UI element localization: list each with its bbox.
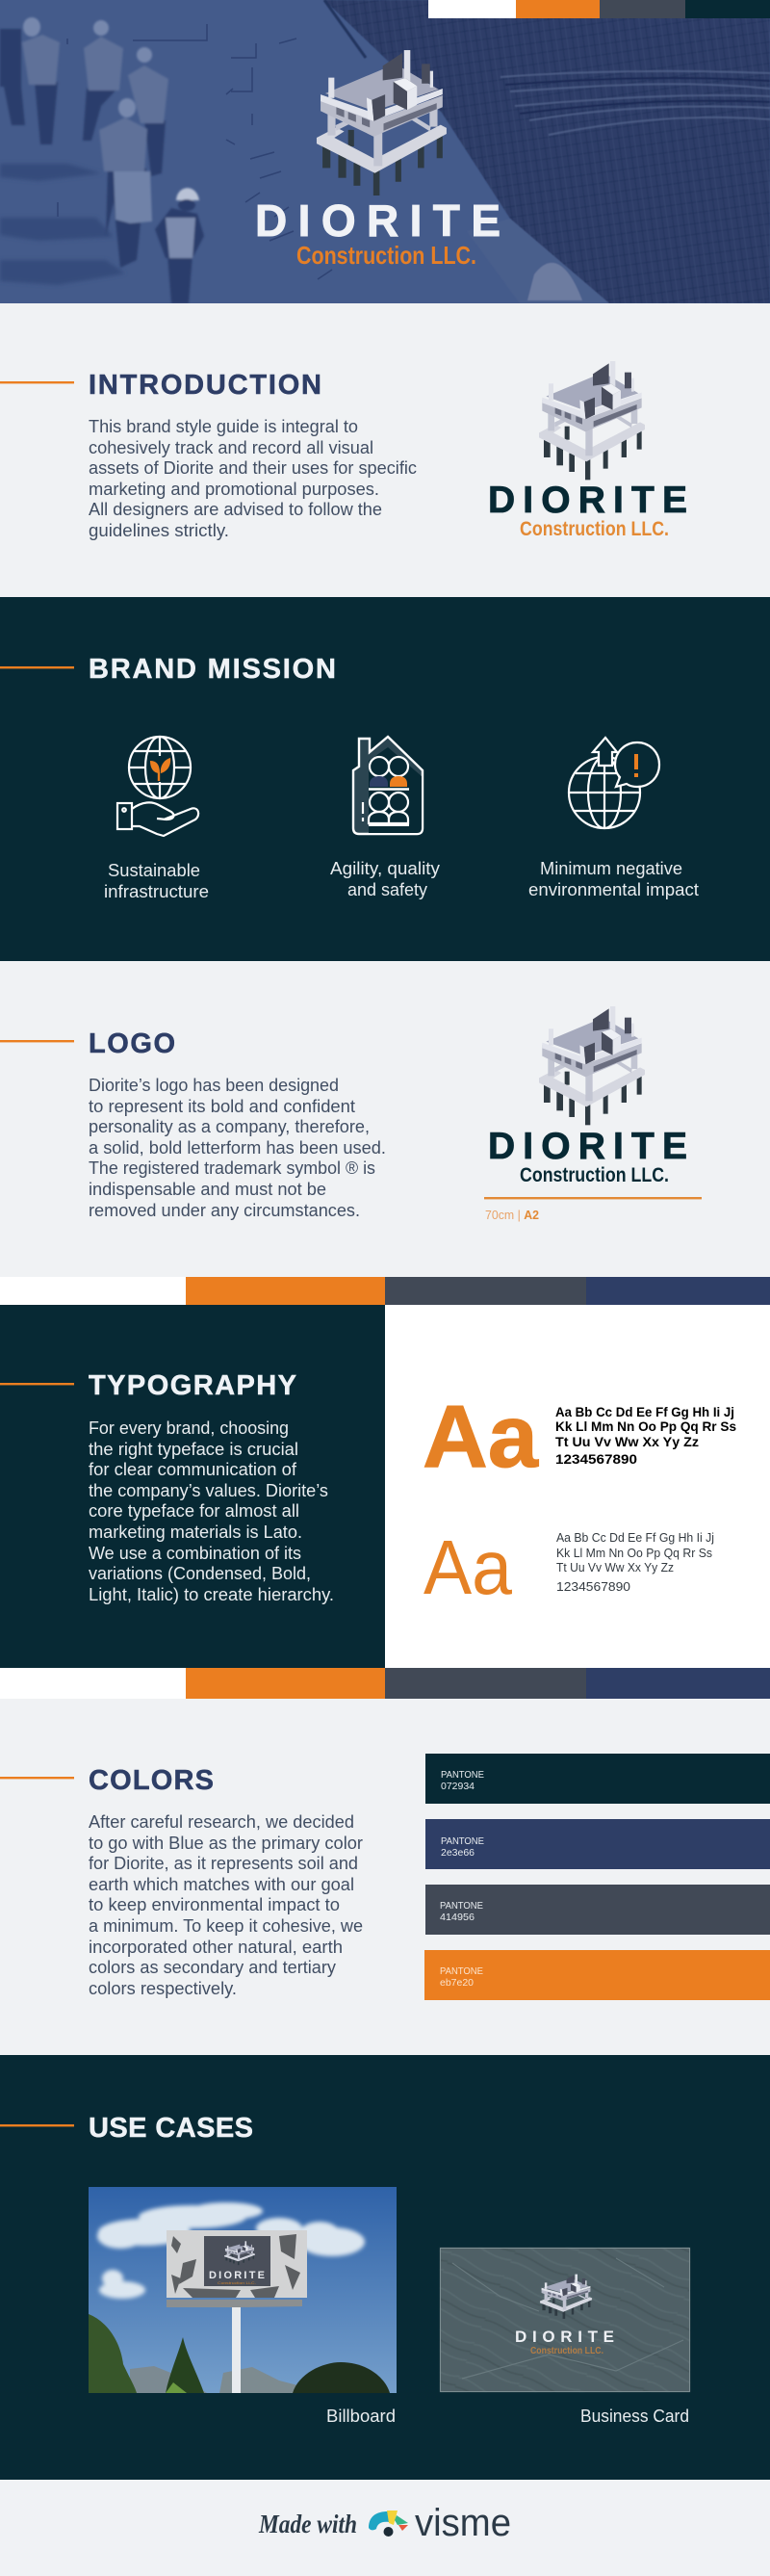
type specimen: regular: Aa Bb Cc Dd Ee Ff Gg Hh Ii Jj [556,1530,714,1545]
background photo: rebar site [324,0,770,303]
panel: colors [0,1699,770,2055]
swatch: grey: 414956 [440,1912,475,1923]
text: logo body: a solid, bold letterform has been used. [89,1138,386,1158]
text: typography body: variations (Condensed, Bold, [89,1564,311,1583]
swatch: orange: eb7e20 [440,1977,474,1989]
text: typography body: We use a combination of its [89,1544,301,1563]
labels: mission items: Minimum negative [540,859,682,878]
swatch: orange [424,1950,770,2000]
swatch: dark teal [425,1754,770,1804]
text: colors body: After careful research, we decided [89,1812,354,1832]
text: introduction body: assets of Diorite and their uses for specific [89,458,417,478]
image: business card: DIORITE [515,2328,614,2346]
text: visme wordmark: visme [415,2502,511,2544]
type specimen: bold: 1234567890 [555,1451,637,1467]
type specimen: bold: Aa Bb Cc Dd Ee Ff Gg Hh Ii Jj [555,1404,734,1419]
colour strip [0,1668,770,1699]
panel: logo [0,961,770,1277]
image: business card [440,2248,690,2392]
type specimen: regular: Aa [424,1524,512,1610]
image: billboard [89,2187,397,2393]
text: logo body [89,1076,386,1220]
logo: dark version: Construction LLC. [520,1164,669,1186]
image: business card: Construction LLC. [530,2346,603,2356]
icon: globe in hand [117,737,198,836]
text: colors body: colors as secondary and tertiary [89,1958,336,1977]
text: typography body: the right typeface is crucial [89,1440,298,1459]
labels: mission items: Sustainable [108,861,200,880]
panel: typography [0,1305,770,1668]
photo: rebar marks [58,24,332,279]
type specimen: regular: Kk Ll Mm Nn Oo Pp Qq Rr Ss [556,1546,712,1560]
logo: dark with orange tagline: Construction LLC. [520,518,669,540]
text: logo body: to represent its bold and confident [89,1097,355,1116]
heading: brand mission: BRAND MISSION [89,654,336,685]
text: typography body: Light, Italic) to create hierarchy. [89,1585,334,1604]
heading: use cases: USE CASES [89,2113,253,2144]
text: introduction body: All designers are advised to follow the [89,500,382,519]
swatch: dark teal: PANTONE [441,1769,484,1781]
logo: dark version: DIORITE [488,1126,687,1167]
type specimen: bold: Tt Uu Vv Ww Xx Yy Zz [555,1434,699,1449]
photo: construction workers [0,17,204,303]
text: typography body: marketing materials is Lato. [89,1522,302,1542]
type specimen: regular [424,1524,714,1610]
text: colors body: to go with Blue as the primary color [89,1834,363,1853]
text: typography body: core typeface for almost all [89,1501,299,1521]
text: logo body: removed under any circumstances. [89,1201,360,1220]
text: colors body: to keep environmental impact to [89,1895,340,1914]
text: introduction body: cohesively track and record all visual [89,438,373,457]
colour strip [428,0,770,18]
labels: mission items: Agility, quality [330,859,440,878]
caption: business card: Business Card [580,2407,689,2426]
type specimen: regular: Tt Uu Vv Ww Xx Yy Zz [556,1560,674,1574]
logo: dark with orange tagline [488,361,687,540]
panel: hero banner [0,0,770,303]
text: typography body [89,1418,334,1604]
swatch: blue: 2e3e66 [441,1847,475,1859]
labels: mission items [104,859,699,901]
text: introduction body: This brand style guide is integral to [89,417,358,436]
text: logo body: personality as a company, therefore, [89,1117,370,1136]
labels: mission items: environmental impact [528,880,699,899]
labels: mission items: infrastructure [104,882,209,901]
text: colors body [89,1812,363,1998]
type specimen: regular: 1234567890 [556,1579,630,1594]
icon: house with people [353,737,423,834]
hero logo: DIORITE [255,195,500,246]
photo: shadows on ground [0,164,125,285]
text: typography body: the company’s values. Diorite’s [89,1481,328,1500]
text: colors body: incorporated other natural, earth [89,1938,343,1957]
panel: brand mission [0,597,770,961]
text: logo body: indispensable and must not be [89,1180,326,1199]
text: typography body: For every brand, choosing [89,1418,289,1438]
icon: globe with warning bubble [569,738,659,828]
swatch: blue: PANTONE [441,1835,484,1847]
heading: typography: TYPOGRAPHY [89,1370,296,1401]
text: colors body: for Diorite, as it represents soil and [89,1854,358,1873]
labels: mission items: and safety [347,880,427,899]
colour strip [0,1277,770,1305]
swatch: grey: PANTONE [440,1900,483,1912]
swatch: dark teal: 072934 [441,1781,475,1792]
hero logo [255,50,500,270]
text: made with: Made with [258,2510,357,2538]
text: logo body: Diorite’s logo has been designed [89,1076,339,1095]
swatch: orange: PANTONE [440,1965,483,1977]
logo: dark with orange tagline: DIORITE [488,480,687,521]
image: billboard: Construction LLC. [218,2280,256,2285]
swatch: grey [425,1885,770,1935]
text: introduction body: marketing and promotional purposes. [89,480,379,499]
text: introduction body [89,417,417,540]
panel: introduction [0,303,770,597]
type specimen: bold: Kk Ll Mm Nn Oo Pp Qq Rr Ss [555,1418,736,1434]
panel: footer [0,2480,770,2576]
hero logo: Construction LLC. [296,241,476,270]
heading: logo: LOGO [89,1028,175,1059]
text: introduction body: guidelines strictly. [89,521,229,540]
type specimen: bold [423,1388,736,1486]
heading: introduction: INTRODUCTION [89,370,321,401]
icon: visme mark [369,2511,408,2537]
text: colors body: colors respectively. [89,1979,237,1998]
text: typography body: for clear communication of [89,1460,297,1479]
panel: use cases [0,2055,770,2480]
text: logo body: The registered trademark symbol ® is [89,1158,375,1178]
text: colors body: a minimum. To keep it cohesive, we [89,1916,363,1936]
swatch: blue [425,1819,770,1869]
caption: billboard: Billboard [326,2407,396,2426]
type specimen: bold: Aa [423,1388,539,1486]
logo size rule: 70cm | A2 [485,1208,539,1222]
image: billboard: DIORITE [209,2270,265,2281]
heading: colors: COLORS [89,1765,214,1796]
text: colors body: earth which matches with our goal [89,1875,354,1894]
logo: dark version [488,1006,687,1186]
